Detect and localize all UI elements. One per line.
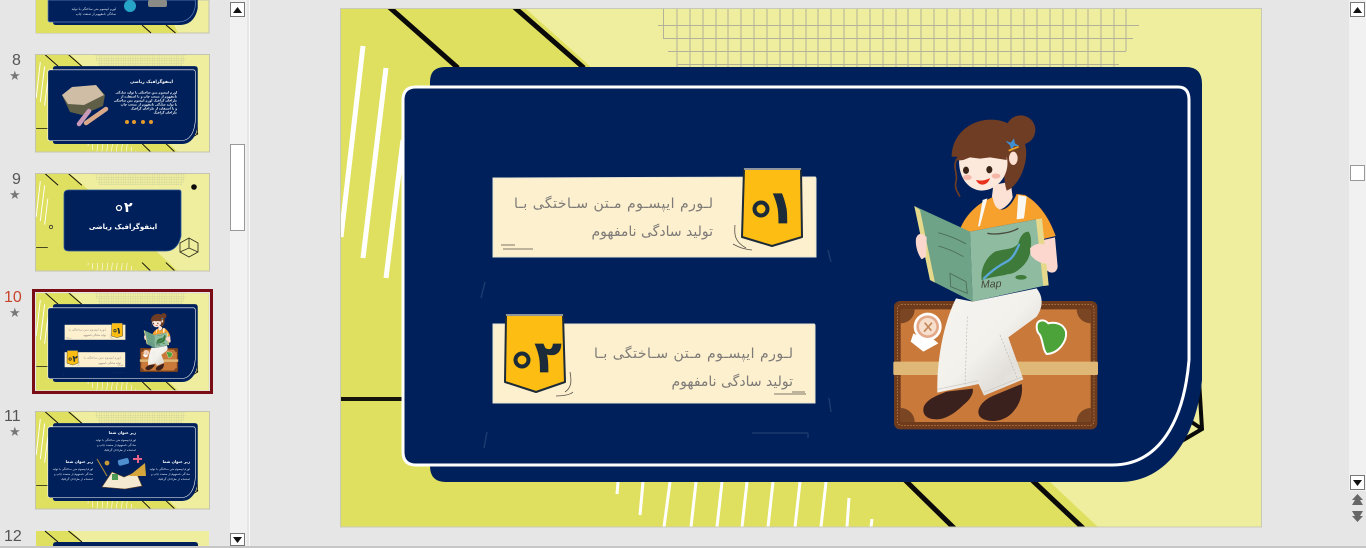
- icon: cube: [180, 238, 198, 257]
- thumbnail: slide 9: [9, 171, 210, 272]
- top text block: لورم ایپسوم متن ساختگی با تولید: [96, 438, 136, 443]
- top text block: سادگی نامفهوم از صنعت چاپ و: [96, 443, 137, 448]
- badge 02: [505, 315, 565, 392]
- right text block: لورم ایپسوم متن ساختگی با تولید: [150, 467, 190, 472]
- body text: لورم ایپسوم متن ساختگی با تولید سادگی: [116, 90, 177, 94]
- body text: [114, 90, 177, 114]
- badge 02: ۲: [535, 332, 562, 383]
- cheeks: [963, 173, 1000, 180]
- scroll thumb: [230, 144, 244, 230]
- map island: [981, 232, 1031, 280]
- bottom status line: [0, 546, 1366, 548]
- right forearm: [1043, 237, 1058, 273]
- shirt: [960, 194, 1056, 241]
- badge 02: ۰: [508, 333, 536, 387]
- illustration: book and tools: [97, 455, 146, 489]
- card 1 text: تولید سادگی نامفهوم: [591, 223, 713, 240]
- card 1 scribble: [501, 225, 752, 250]
- thumbnail: slide 11: [4, 408, 210, 510]
- faint scribbles on the panel: [481, 250, 831, 448]
- ear: [1009, 152, 1018, 165]
- main scrollbar: [1349, 0, 1366, 522]
- thumbnail: slide 12: [4, 528, 209, 546]
- left text block: استفاده از طراحان گرافیک: [61, 477, 93, 481]
- hair clip: [1005, 138, 1019, 151]
- card 2 scribble: [556, 372, 806, 396]
- scroll up button: [1350, 2, 1364, 16]
- previous slide arrows: [1352, 494, 1363, 505]
- scroll down button: [1350, 476, 1364, 490]
- illustration: girl reading a map on a suitcase: [893, 115, 1098, 429]
- card 1 paper: [493, 177, 816, 257]
- sticker: compass stamp: [911, 313, 942, 352]
- scroll down button: [230, 534, 244, 546]
- slide number 8: 8: [12, 52, 21, 69]
- top text block: زیر عنوان شما: [109, 430, 136, 435]
- card 2 text: [594, 345, 793, 390]
- left text block: زیر عنوان شما: [66, 459, 93, 464]
- slide background with grid: [340, 6, 1262, 529]
- card 2 paper: [493, 324, 815, 403]
- slide number 9: 9: [12, 171, 21, 188]
- panel: [64, 190, 181, 251]
- shoes: [923, 384, 1022, 421]
- map label: Map: [981, 278, 1002, 291]
- slide number 11: 11: [4, 408, 21, 425]
- pane divider: [249, 0, 250, 546]
- navy panel: [403, 67, 1202, 482]
- thumbnail scrollbar: [230, 0, 247, 546]
- star: ★: [9, 188, 21, 203]
- next slide arrows: [1352, 511, 1363, 522]
- book: [914, 206, 1049, 302]
- black dot: [191, 184, 197, 190]
- title: اینفوگرافیک ریاضی: [130, 79, 173, 85]
- neck: [991, 182, 1013, 210]
- curl: [955, 158, 960, 197]
- eyes: [963, 166, 992, 174]
- scroll thumb: [1350, 166, 1364, 180]
- hair back and bun: [952, 115, 1035, 191]
- mouth: [976, 178, 990, 185]
- thumbnail: slide 10 selected: [4, 289, 212, 392]
- suspenders: [978, 195, 1027, 227]
- card 2 text: تولید سادگی نامفهوم: [671, 373, 793, 390]
- icon: eraser and chalk: [62, 85, 106, 124]
- card 2 text: لـورم ایپسـوم مـتن سـاختگی بـا: [594, 345, 793, 362]
- thumbnail: slide 7: [36, 0, 209, 33]
- dots: [125, 120, 153, 124]
- body text: با تولید سادگی نامفهوم از صنعت چاپ: [121, 102, 177, 106]
- left text block: لورم ایپسوم متن ساختگی با تولید: [53, 467, 93, 472]
- body text: طراحان گرافیک لورم ایپسوم متن ساختگی: [114, 98, 177, 102]
- card 1 text: [514, 195, 713, 240]
- thumbnail: slide 8: [9, 52, 210, 153]
- body text: طراحان گرافیک: [153, 110, 177, 114]
- star: ★: [9, 69, 21, 84]
- heading: اینفوگرافیک ریاضی: [89, 222, 157, 231]
- sticker: cactus: [1037, 320, 1066, 354]
- number: ۰۲: [115, 200, 133, 216]
- badge 01: ۰: [747, 182, 775, 236]
- right text block: [150, 459, 191, 481]
- right text block: زیر عنوان شما: [163, 459, 190, 464]
- top text block: [96, 430, 137, 452]
- thumbnail: slide 7: لورم ایپسوم متن ساختگی با تولید: [72, 7, 116, 12]
- badge 01: [742, 169, 802, 246]
- left text block: سادگی نامفهوم از صنعت چاپ و: [53, 472, 94, 477]
- body text: و با استفاده از طراحان گرافیک: [131, 106, 177, 110]
- scroll up button: [230, 2, 244, 16]
- card 1 text: لـورم ایپسـوم مـتن سـاختگی بـا: [514, 195, 713, 212]
- thumbnail: slide 7: سادگی نامفهوم از صنعت چاپ: [76, 12, 116, 17]
- face: [959, 157, 1008, 191]
- badge 01: ۱: [767, 180, 795, 234]
- card 2: [493, 315, 815, 403]
- thumbnail list: [4, 0, 212, 546]
- body text: نامفهوم از صنعت چاپ و با استفاده از: [120, 94, 177, 98]
- bangs: [957, 133, 1007, 161]
- right text block: استفاده از طراحان گرافیک: [158, 477, 190, 481]
- star: ★: [9, 425, 21, 440]
- suitcase: [893, 301, 1098, 429]
- right text block: سادگی نامفهوم از صنعت چاپ و: [150, 472, 191, 477]
- star: ★: [9, 306, 21, 321]
- small ring: [49, 225, 53, 229]
- slide frame: [340, 8, 1262, 527]
- slide number 12: 12: [4, 528, 22, 545]
- hands: [916, 234, 1053, 264]
- main slide: [340, 6, 1262, 529]
- card 1: [493, 169, 816, 257]
- top text block: استفاده از طراحان گرافیک: [104, 448, 136, 452]
- slide number 10: 10: [4, 289, 22, 306]
- left text block: [53, 459, 94, 481]
- trousers: [937, 288, 1042, 396]
